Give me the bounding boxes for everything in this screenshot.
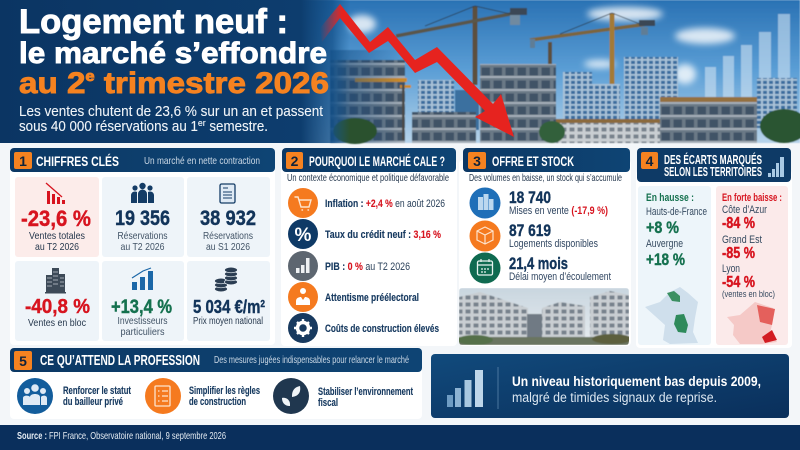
- buildings: [418, 80, 454, 120]
- icon: buildings: [478, 194, 494, 210]
- icon: coins: [214, 267, 238, 292]
- stat: délai: Délai moyen d’écoulement: [509, 271, 611, 283]
- card: en hausse: +8 %: [646, 218, 679, 237]
- card: en hausse: +18 %: [646, 250, 685, 269]
- item: taux: Taux du crédit neuf : 3,16 %: [325, 229, 441, 241]
- stat: logements disponibles: 87 619: [509, 221, 551, 240]
- card: réservations T2: au T2 2026: [120, 241, 165, 253]
- header 3: 3: [473, 153, 481, 169]
- card: en forte baisse: Grand Est: [722, 234, 762, 246]
- card: en forte baisse: -54 %: [722, 274, 755, 291]
- header 5: 5: [19, 353, 27, 369]
- left navy header band: [0, 0, 350, 143]
- icon: bars: [296, 258, 310, 273]
- cranes: [396, 6, 655, 123]
- stat: mises en vente: 18 740: [509, 188, 551, 207]
- photo: residential buildings: [457, 288, 632, 345]
- icon: people: [23, 384, 47, 405]
- header 2: [282, 148, 456, 172]
- card: ventes totales: au T2 2026: [35, 241, 79, 253]
- stat: mises en vente: Mises en vente (-17,9 %): [509, 205, 608, 217]
- icon: rising bars: [447, 370, 483, 407]
- stat: logements disponibles: Logements disponibles: [509, 238, 598, 250]
- item: taux: %: [295, 225, 312, 246]
- item: PIB: [288, 251, 410, 281]
- card: réservations S1: [187, 177, 270, 257]
- callout: niveau historique: [431, 354, 789, 418]
- measure: bailleur: du bailleur privé: [63, 396, 123, 408]
- card: réservations S1: au S1 2026: [206, 241, 250, 253]
- header 4: 4: [646, 153, 654, 169]
- card: en forte baisse: Lyon: [722, 263, 740, 275]
- footer: source: [0, 425, 800, 450]
- hero photo: construction site: [300, 0, 800, 144]
- measure: fiscal: fiscal: [318, 397, 338, 409]
- card: en hausse: Hauts-de-France: [646, 206, 707, 218]
- faded rising bars: [705, 14, 790, 107]
- panel 2: pourquoi le marché cale: [281, 148, 457, 346]
- item: attentisme: [288, 282, 419, 312]
- icon: falling bars: [46, 183, 65, 204]
- icon: towers: [45, 268, 66, 294]
- header 3: [463, 148, 630, 172]
- card: réservations S1: Réservations: [203, 230, 253, 242]
- icon: cart: [295, 197, 311, 210]
- card: ventes en bloc: -40,8 %: [25, 296, 90, 318]
- icon: small bars: [768, 157, 784, 177]
- panel 4: écarts territoriaux: [636, 148, 792, 348]
- header 1: 1: [19, 153, 27, 169]
- stat: mises en vente: [470, 188, 608, 218]
- header 1: [10, 148, 275, 172]
- icon: gear: [294, 319, 312, 337]
- header 4: [637, 148, 791, 182]
- icon: calendar: [478, 259, 492, 275]
- title: Logement neuf :: [19, 3, 288, 41]
- item: inflation: Inflation : +2,4 % en août 2026: [325, 198, 445, 210]
- header 2: 2: [291, 153, 299, 169]
- card: en forte baisse: -85 %: [722, 245, 755, 262]
- subtitle: er: [198, 118, 206, 129]
- title: [19, 3, 329, 100]
- subtitle: [19, 104, 323, 135]
- measure: règles: [145, 378, 260, 414]
- map: France green: [645, 287, 698, 344]
- callout: niveau historique: malgré de timides signaux de reprise.: [512, 390, 717, 405]
- card: investisseurs: [102, 261, 184, 341]
- card: prix moyen: 5 034 €/m: [193, 297, 274, 317]
- icon: rising chart: [132, 268, 153, 290]
- card: prix moyen: [187, 261, 270, 341]
- subtitle: semestre.: [206, 119, 268, 135]
- map: France red: [727, 302, 777, 344]
- measure: bailleur: Renforcer le statut: [63, 385, 131, 397]
- header 5: CE QU’ATTEND LA PROFESSION: [40, 352, 200, 369]
- card: ventes totales: Ventes totales: [29, 230, 85, 242]
- card: investisseurs: +13,4 %: [111, 297, 172, 318]
- icon: people: [131, 183, 154, 203]
- panel 3: offre et stock: [457, 148, 632, 346]
- card: réservations T2: 19 356: [115, 207, 170, 230]
- red falling arrow: [320, 4, 514, 137]
- title: trimestre 2026: [95, 67, 329, 100]
- title: le marché s’effondre: [19, 37, 327, 70]
- card: en forte baisse: (ventes en bloc): [722, 289, 775, 299]
- item: inflation: [288, 188, 445, 218]
- card: en hausse: Auvergne: [646, 238, 683, 250]
- item: taux: [288, 219, 441, 249]
- title: e: [85, 68, 95, 85]
- header 5: Des mesures jugées indispensables pour relancer le marché: [214, 354, 409, 366]
- card: réservations T2: Réservations: [118, 230, 168, 242]
- icon: plant: [282, 386, 300, 406]
- card: en forte baisse: [716, 186, 788, 345]
- measure: fiscal: Stabiliser l’environnement: [318, 386, 413, 398]
- card: en forte baisse: Côte d’Azur: [722, 204, 767, 216]
- measure: bailleur: [17, 378, 131, 414]
- card: ventes totales: [15, 177, 99, 257]
- card: investisseurs: particuliers: [120, 326, 164, 338]
- panel 2 subtitle: Un contexte économique et politique défavorable: [287, 172, 449, 184]
- subtitle: sous 40 000 réservations au 1: [19, 119, 213, 135]
- card: ventes totales: -23,6 %: [21, 206, 91, 231]
- footer: source: Source : FPI France, Observatoire national, 9 septembre 2026: [17, 430, 226, 442]
- icon: person: [296, 288, 310, 305]
- stat: délai: [470, 252, 611, 284]
- measure: règles: de construction: [189, 396, 246, 408]
- panel 5: ce qu'attend la profession: [10, 348, 422, 419]
- card: réservations T2: [102, 177, 184, 257]
- item: coûts: [288, 313, 439, 343]
- card: réservations S1: 38 932: [200, 207, 256, 230]
- title: au 2: [19, 67, 79, 100]
- header 2: POURQUOI LE MARCHÉ CALE ?: [309, 154, 445, 169]
- stat: délai: 21,4 mois: [509, 254, 568, 273]
- card: en hausse: [638, 186, 711, 345]
- header 3: OFFRE ET STOCK: [492, 154, 574, 169]
- callout: niveau historique: Un niveau historiquement bas depuis 2009,: [512, 373, 761, 389]
- measure: règles: Simplifier les règles: [189, 385, 260, 397]
- icon: box: [477, 227, 493, 244]
- icon: checklist: [155, 386, 170, 406]
- header 1: CHIFFRES CLÉS: [36, 153, 119, 169]
- card: investisseurs: Investisseurs: [118, 315, 168, 327]
- measure: fiscal: [273, 378, 413, 414]
- item: PIB: PIB : 0 % au T2 2026: [325, 261, 410, 273]
- panel 3 subtitle: Des volumes en baisse, un stock qui s’accumule: [469, 172, 622, 184]
- icon: document: [220, 184, 235, 203]
- card: en forte baisse: -84 %: [722, 215, 755, 232]
- card: prix moyen: Prix moyen national: [193, 316, 263, 327]
- panel 1: chiffres clés: [10, 148, 275, 345]
- item: attentisme: Attentisme préélectoral: [325, 292, 419, 304]
- card: prix moyen: 2: [260, 299, 265, 310]
- subtitle: Les ventes chutent de 23,6 % sur un an et passent: [19, 104, 323, 120]
- card: en hausse: En hausse :: [646, 192, 694, 204]
- card: ventes en bloc: [15, 261, 99, 341]
- header 5: [10, 348, 422, 372]
- header 1: Un marché en nette contraction: [144, 155, 260, 167]
- card: ventes en bloc: Ventes en bloc: [28, 317, 86, 329]
- item: coûts: Coûts de construction élevés: [325, 323, 439, 335]
- stat: logements disponibles: [470, 220, 598, 252]
